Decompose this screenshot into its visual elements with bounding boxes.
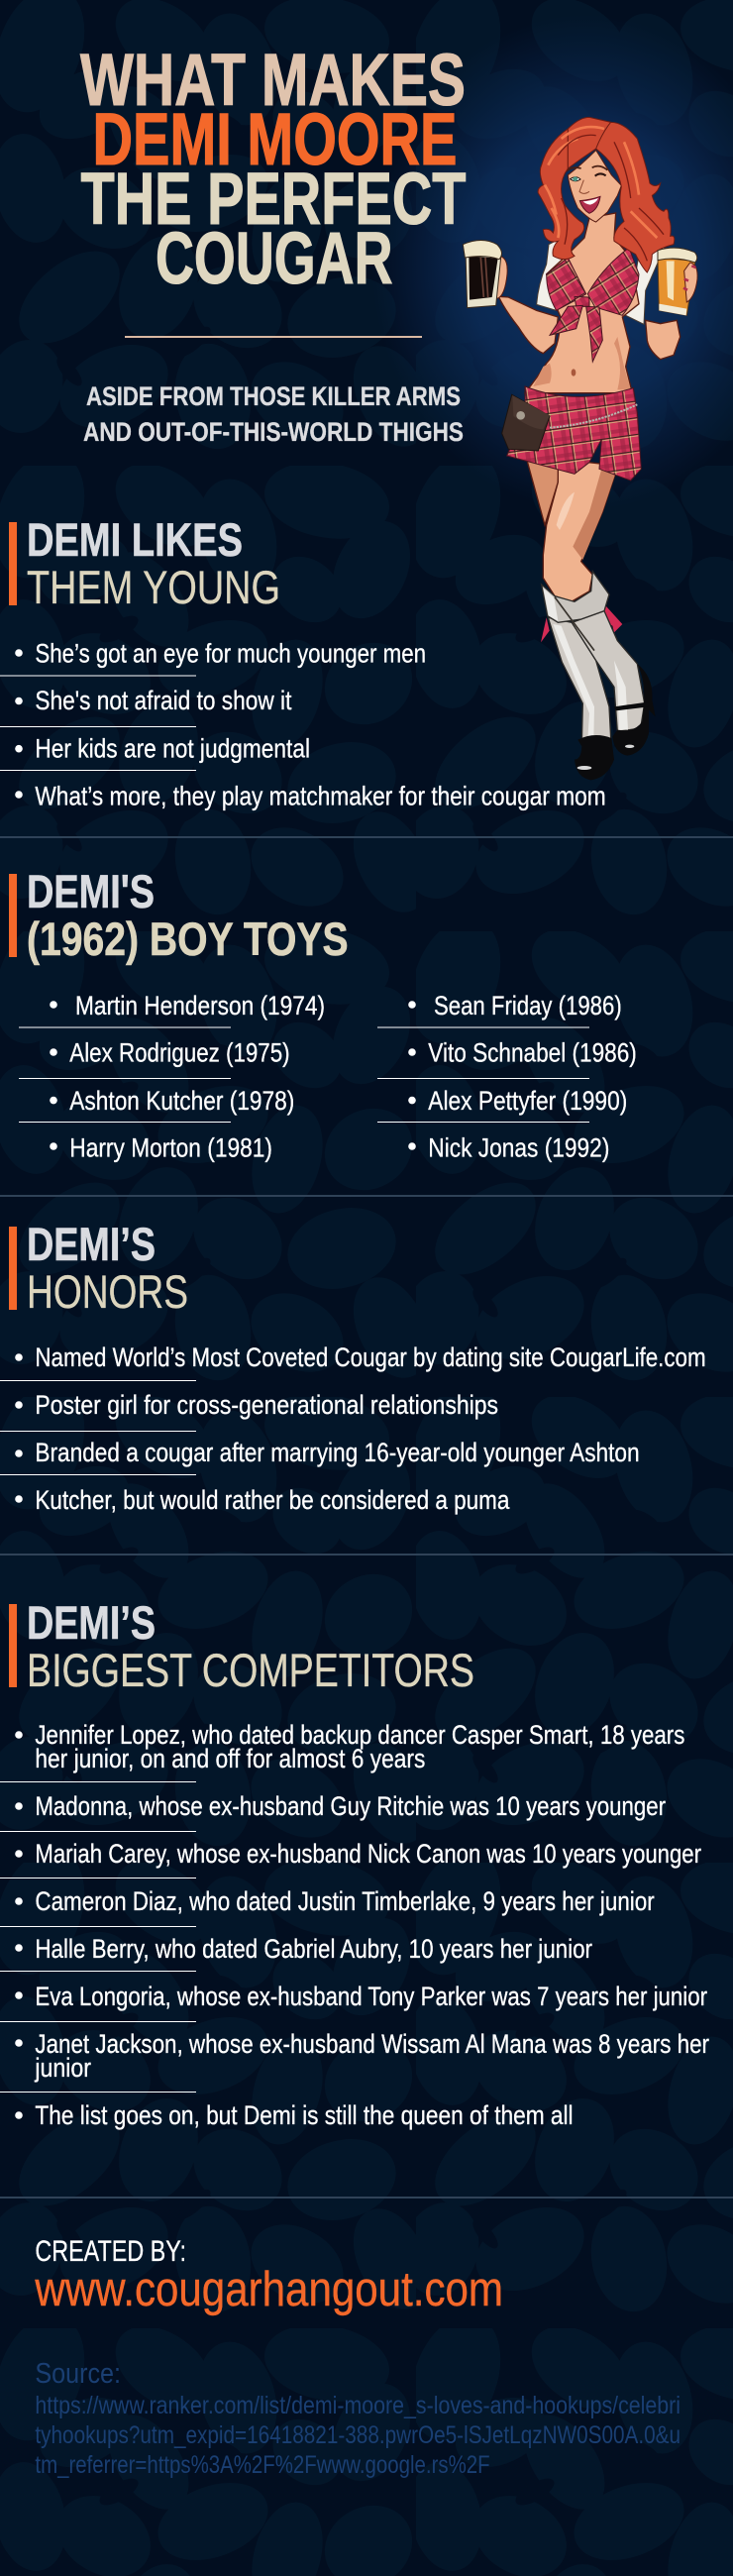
hair top <box>568 117 611 168</box>
heading: BIGGEST COMPETITORS <box>27 1644 474 1696</box>
title: THE PERFECT <box>81 158 466 240</box>
footer: credit: CREATED BY: <box>35 2235 186 2268</box>
bullet list <box>0 1342 706 1515</box>
list: right column: Nick Jonas (1992) <box>428 1133 609 1163</box>
right beer and hand <box>658 258 695 315</box>
plaid skirt <box>507 386 641 481</box>
heading: (1962) BOY TOYS <box>27 912 349 965</box>
list: left column <box>19 991 325 1163</box>
subtitle: AND OUT-OF-THIS-WORLD THIGHS <box>83 417 464 447</box>
list: right column: Vito Schnabel (1986) <box>428 1038 637 1068</box>
footer: source: tm_referrer=https%3A%2F%2Fwww.google.rs%2F <box>35 2451 490 2479</box>
heading: DEMI’S <box>27 1596 156 1649</box>
legs and socks <box>527 459 656 780</box>
list: right column <box>377 991 637 1163</box>
panel: Demi's honors <box>0 1218 706 1515</box>
subtitle <box>83 381 464 447</box>
subtitle: ASIDE FROM THOSE KILLER ARMS <box>86 381 461 411</box>
list: left column: Alex Rodriguez (1975) <box>69 1038 290 1068</box>
title: COUGAR <box>156 217 392 299</box>
list: right column: Sean Friday (1986) <box>434 991 622 1020</box>
bullet list: She’s got an eye for much younger men <box>35 638 426 668</box>
list: right column: Alex Pettyfer (1990) <box>428 1086 627 1116</box>
right arm <box>646 320 681 360</box>
bullet list: She's not afraid to show it <box>35 686 292 715</box>
panel: Demi's boy toys <box>9 865 637 1163</box>
bullet list: junior <box>35 2053 91 2083</box>
footer: source: Source: <box>35 2358 121 2390</box>
list: left column: Ashton Kutcher (1978) <box>69 1086 294 1116</box>
bullet list <box>0 1720 709 2130</box>
list: left column: Harry Morton (1981) <box>69 1133 272 1163</box>
heading <box>9 1596 474 1696</box>
list: left column: Martin Henderson (1974) <box>75 991 325 1020</box>
heading: DEMI LIKES <box>27 513 243 566</box>
title <box>80 39 466 299</box>
bullet list: Her kids are not judgmental <box>35 733 310 763</box>
heading <box>9 513 280 613</box>
footer: source <box>35 2358 681 2479</box>
left hand and dark beer <box>492 256 507 298</box>
bullet list: The list goes on, but Demi is still the queen of them all <box>35 2100 574 2130</box>
torso and neck <box>525 213 639 393</box>
bullet list: Halle Berry, who dated Gabriel Aubry, 10 years her junior <box>35 1934 592 1964</box>
footer: credit <box>35 2235 503 2316</box>
bullet list: Kutcher, but would rather be considered a puma <box>35 1485 510 1515</box>
bullet list: What’s more, they play matchmaker for their cougar mom <box>35 782 606 811</box>
heading: DEMI’S <box>27 1218 156 1270</box>
hair right <box>596 122 675 272</box>
pouch bag <box>502 394 550 451</box>
bullet list <box>0 638 606 811</box>
heading: DEMI'S <box>27 865 155 917</box>
title: WHAT MAKES <box>80 39 466 121</box>
bullet list: her junior, on and off for almost 6 years <box>35 1744 425 1773</box>
panel: Demi's biggest competitors <box>0 1596 709 2130</box>
footer: credit: www.cougarhangout.com <box>35 2263 503 2316</box>
left arm <box>498 296 558 354</box>
illustration: redhead woman with two beers <box>463 117 697 780</box>
hair left <box>538 129 584 260</box>
sleeves <box>537 238 568 310</box>
heading <box>9 865 349 965</box>
title: DEMI MOORE <box>93 98 458 180</box>
head and hair <box>538 117 675 272</box>
bikini top <box>547 258 586 310</box>
heading <box>9 1218 188 1318</box>
heading: THEM YOUNG <box>27 561 280 613</box>
panel: Demi likes them young <box>0 513 606 811</box>
bullet list: Poster girl for cross-generational relationships <box>35 1390 498 1420</box>
face <box>568 151 621 222</box>
heading: HONORS <box>27 1265 188 1318</box>
